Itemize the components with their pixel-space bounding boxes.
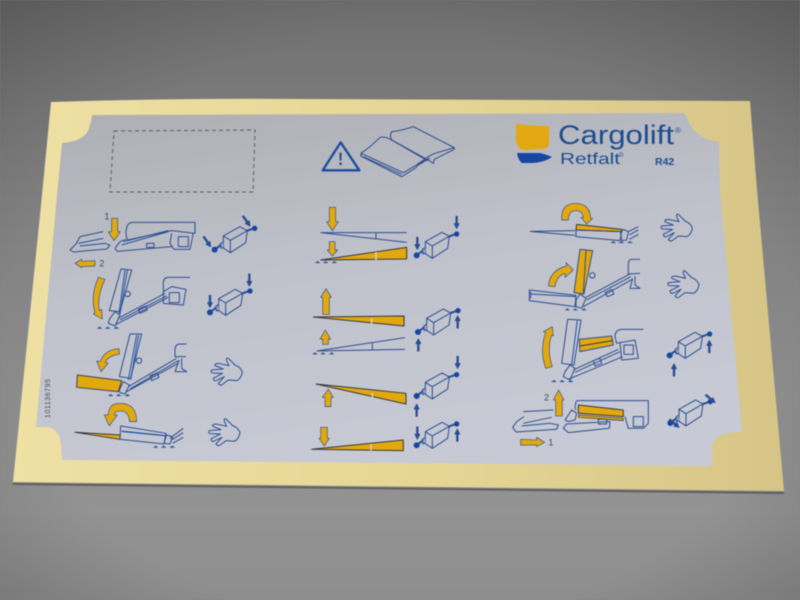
hand	[209, 419, 240, 446]
yellow platform	[77, 375, 122, 392]
logo text: Cargolift	[558, 120, 675, 150]
seesaw step 3	[316, 356, 460, 416]
seesaw step 1	[315, 207, 459, 263]
icon: open book	[361, 127, 454, 177]
hand	[211, 358, 242, 385]
sheet shadow	[13, 483, 784, 494]
actuator	[207, 274, 253, 315]
step 3	[77, 334, 242, 396]
arrow down	[108, 218, 120, 241]
seesaw step 2	[313, 289, 461, 354]
unfold step 4	[513, 390, 716, 447]
step 1: folded lift	[70, 212, 257, 268]
curved arrow	[93, 277, 105, 319]
column: middle	[312, 207, 461, 451]
actuator	[202, 215, 257, 253]
step numbers: 2	[99, 258, 104, 268]
logo	[516, 120, 681, 168]
U arrow	[104, 403, 137, 426]
warning and manual icons	[323, 127, 454, 177]
unfold step 3	[542, 319, 712, 382]
step 4	[75, 403, 240, 447]
silver label	[36, 113, 742, 466]
logo: Retfalt	[560, 151, 621, 168]
step 2	[93, 269, 253, 328]
blank dashed box	[110, 130, 255, 192]
yellow backing sheet	[13, 99, 784, 491]
column: right	[513, 203, 716, 447]
logo mark: blue	[517, 153, 552, 163]
unfold step 4: 1	[548, 437, 553, 447]
model label: R42	[655, 156, 674, 168]
logo mark: yellow	[516, 124, 549, 150]
seesaw step 4	[312, 421, 460, 451]
column: left	[70, 212, 257, 447]
arrow left	[75, 259, 95, 268]
unfold step 4: 2	[544, 393, 549, 403]
logo: ®	[675, 126, 681, 135]
step numbers: 1	[104, 212, 109, 222]
unfold step 2	[529, 249, 699, 310]
icon: warning triangle	[323, 142, 359, 170]
part number: 101136795	[45, 379, 52, 418]
curved arrow	[97, 349, 119, 372]
step numbers	[99, 212, 109, 268]
logo: ®	[619, 152, 624, 159]
unfold step 1	[530, 203, 692, 243]
